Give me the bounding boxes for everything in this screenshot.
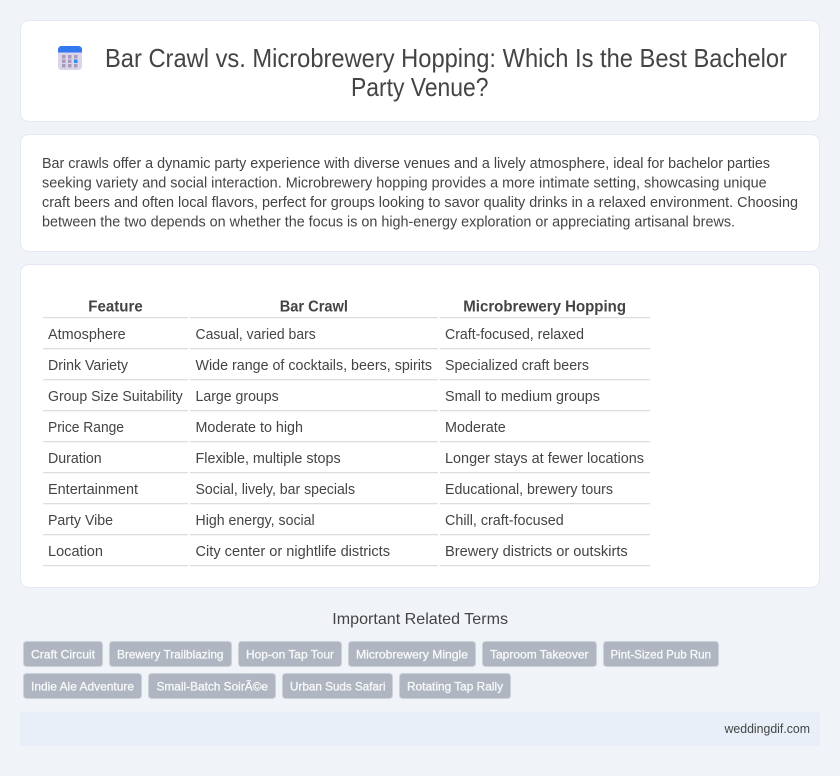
tag: craft circuit [24,642,102,666]
tag: indie ale adventure: Indie Ale Adventure [31,679,134,693]
tag: hop-on tap tour [238,642,342,666]
table header: Feature [88,298,143,316]
row: price range: Moderate [445,420,506,436]
tag: rotating tap rally: Rotating Tap Rally [407,679,503,693]
row: drink variety: Drink Variety [48,358,129,374]
tag: craft circuit: Craft Circuit [31,647,96,661]
intro text block: between the two depends on whether the focus is on high-energy exploration or appreciating artisanal brews. [42,214,735,230]
row: duration: Flexible, multiple stops [196,451,341,467]
panel: comparison table [20,264,820,588]
row: entertainment: Social, lively, bar specials [196,482,355,498]
header panel [20,20,820,122]
row: drink variety: Specialized craft beers [445,358,589,374]
row: drink variety [48,358,589,374]
tag: taproom takeover [482,642,596,666]
row: entertainment: Entertainment [48,482,138,498]
table rules [43,317,650,566]
row: group size suitability [48,389,600,405]
intro text block [42,156,798,230]
row: location: Location [48,544,103,560]
tag: hop-on tap tour: Hop-on Tap Tour [246,647,334,661]
tag: taproom takeover: Taproom Takeover [490,647,588,661]
row: party vibe: Party Vibe [48,513,113,529]
title: Bar Crawl vs. Microbrewery Hopping: Which Is the Best Bachelor [105,45,787,73]
row: party vibe [48,513,564,529]
tag: small-batch soiree: Small-Batch SoirÃ©e [156,679,268,693]
row: price range [48,420,506,436]
row: price range: Moderate to high [196,420,303,436]
row: atmosphere [48,327,584,343]
table header [88,298,626,316]
panel: introduction [20,134,820,252]
heading: important related terms: Important Related Terms [332,611,508,628]
row: group size suitability: Group Size Suitability [48,389,183,405]
table header: Bar Crawl [280,298,348,316]
tag: urban suds safari [282,674,392,698]
title [105,45,787,102]
tag: urban suds safari: Urban Suds Safari [290,679,386,693]
row: duration: Longer stays at fewer locations [445,451,644,467]
tag: microbrewery mingle: Microbrewery Mingle [356,647,468,661]
row: duration: Duration [48,451,102,467]
row: location: Brewery districts or outskirts [445,544,628,560]
icon: calendar [58,46,82,70]
row: group size suitability: Large groups [196,389,279,405]
related term tags [24,642,718,698]
row: price range: Price Range [48,420,124,436]
row: drink variety: Wide range of cocktails, beers, spirits [196,358,432,374]
tag: microbrewery mingle [348,642,476,666]
footer site name: weddingdif.com [724,722,810,736]
row: location [48,544,628,560]
intro text block: craft beers and often local flavors, perfect for groups looking to savor quality drinks in a relaxed environment. Choosing [42,195,798,211]
tag: indie ale adventure [24,674,142,698]
tag: pint-sized pub run: Pint-Sized Pub Run [610,647,711,661]
table header: Microbrewery Hopping [463,298,626,316]
row: atmosphere: Craft-focused, relaxed [445,327,584,343]
tag: rotating tap rally [400,674,510,698]
row: party vibe: Chill, craft-focused [445,513,564,529]
row: group size suitability: Small to medium groups [445,389,600,405]
row: duration [48,451,644,467]
row: atmosphere: Casual, varied bars [196,327,316,343]
row: entertainment: Educational, brewery tours [445,482,613,498]
tag: small-batch soiree [148,674,276,698]
tag: brewery trailblazing [110,642,232,666]
row: atmosphere: Atmosphere [48,327,126,343]
intro text block: Bar crawls offer a dynamic party experience with diverse venues and a lively atmosphere, ideal for bachelor parties [42,156,770,172]
title: Party Venue? [351,74,488,102]
tag: pint-sized pub run [604,642,718,666]
footer [20,712,820,746]
tag: brewery trailblazing: Brewery Trailblazing [117,647,224,661]
intro text block: seeking variety and social interaction. Microbrewery hopping provides a more intimate setting, showcasing unique [42,176,767,192]
row: entertainment [48,482,613,498]
row: location: City center or nightlife districts [196,544,390,560]
row: party vibe: High energy, social [196,513,315,529]
